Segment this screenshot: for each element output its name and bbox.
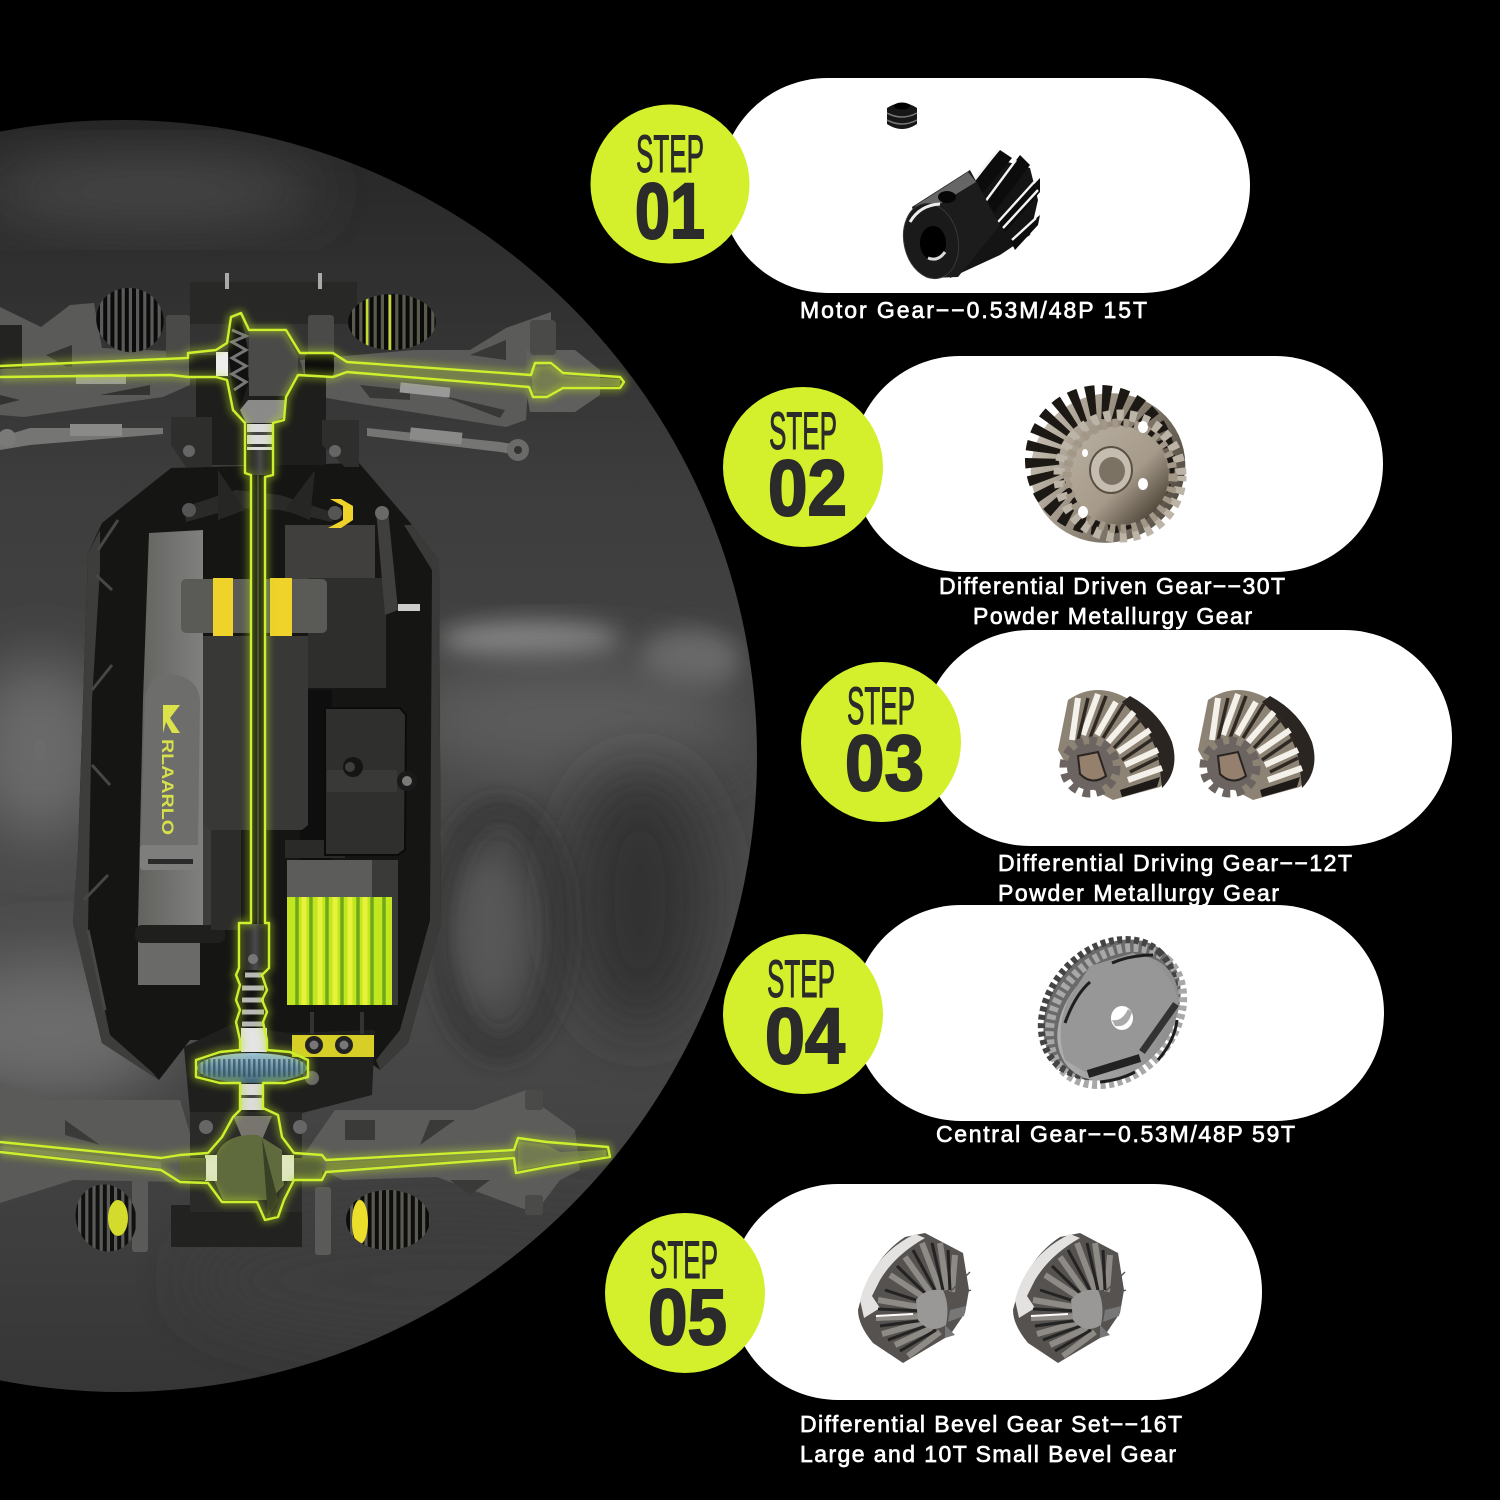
illustration: RC car chassis — [0, 273, 624, 1260]
badge — [801, 662, 961, 822]
battery strap — [135, 530, 225, 985]
panel: step 02 — [723, 356, 1383, 572]
pill — [922, 630, 1452, 846]
icon: set screw — [887, 102, 917, 129]
caption: step 04: Central Gear−−0.53M/48P 59T — [936, 1121, 1295, 1147]
badge — [723, 934, 883, 1094]
badge: STEP — [769, 402, 837, 461]
caption: step 02: Powder Metallurgy Gear — [973, 603, 1252, 629]
icon: bevel gear left — [858, 1233, 971, 1363]
icon: central spur gear — [1014, 912, 1210, 1111]
pill — [853, 905, 1384, 1121]
step number: 03 — [845, 718, 924, 807]
motor lime heatsink — [287, 897, 392, 1005]
motor mount yellow plate — [292, 1012, 374, 1057]
front shock absorbers — [96, 288, 436, 352]
battery tab with yellow clips — [181, 578, 327, 636]
logo on strap — [162, 705, 180, 834]
icon: driving gear left — [1058, 690, 1174, 800]
panel: step 04 — [723, 905, 1384, 1121]
caption: step 03: Differential Driving Gear−−12T — [998, 850, 1352, 876]
caption: step 03: Powder Metallurgy Gear — [998, 880, 1279, 906]
step number: 02 — [768, 443, 847, 532]
center cover — [203, 636, 308, 830]
step number: 01 — [635, 166, 705, 255]
badge: STEP — [636, 125, 704, 184]
badge: STEP — [767, 950, 835, 1009]
logo on strap: RLAARLO — [158, 739, 177, 835]
panel: step 05 — [605, 1184, 1262, 1400]
rear suspension — [0, 1025, 580, 1255]
caption: step 02 — [939, 573, 1285, 629]
badge — [723, 387, 883, 547]
icon: motor pinion gear — [897, 150, 1040, 284]
icon: differential driven gear — [1006, 368, 1210, 568]
step number: 04 — [765, 991, 845, 1080]
front suspension arms and links — [0, 273, 600, 522]
pill — [852, 356, 1383, 572]
panel: step 03 — [801, 630, 1452, 846]
pill — [730, 1184, 1262, 1400]
caption: step 05: Differential Bevel Gear Set−−16T — [800, 1411, 1182, 1437]
right interior blocks — [211, 578, 398, 1005]
driveshaft parts inside highlight — [0, 316, 620, 1218]
caption: step 05: Large and 10T Small Bevel Gear — [800, 1441, 1176, 1467]
badge: STEP — [847, 677, 915, 736]
caption: step 03 — [998, 850, 1352, 906]
badge — [605, 1213, 765, 1373]
caption: step 02: Differential Driven Gear−−30T — [939, 573, 1285, 599]
caption: step 05 — [800, 1411, 1182, 1467]
panel: step 01 — [590, 78, 1250, 293]
panel: blurred background circle — [0, 100, 770, 1410]
icon: bevel gear right — [1013, 1233, 1126, 1363]
badge — [590, 104, 750, 264]
pill — [720, 78, 1250, 293]
steering parts — [328, 499, 420, 615]
icon: driving gear right — [1198, 690, 1314, 800]
badge: STEP — [650, 1231, 718, 1290]
caption: step 01: Motor Gear−−0.53M/48P 15T — [800, 297, 1147, 323]
step number: 05 — [648, 1272, 727, 1361]
chassis tub — [73, 463, 441, 1080]
lime glow outline of drivetrain — [0, 313, 624, 1220]
rear shock absorbers — [76, 1184, 430, 1252]
receiver box — [285, 708, 417, 858]
